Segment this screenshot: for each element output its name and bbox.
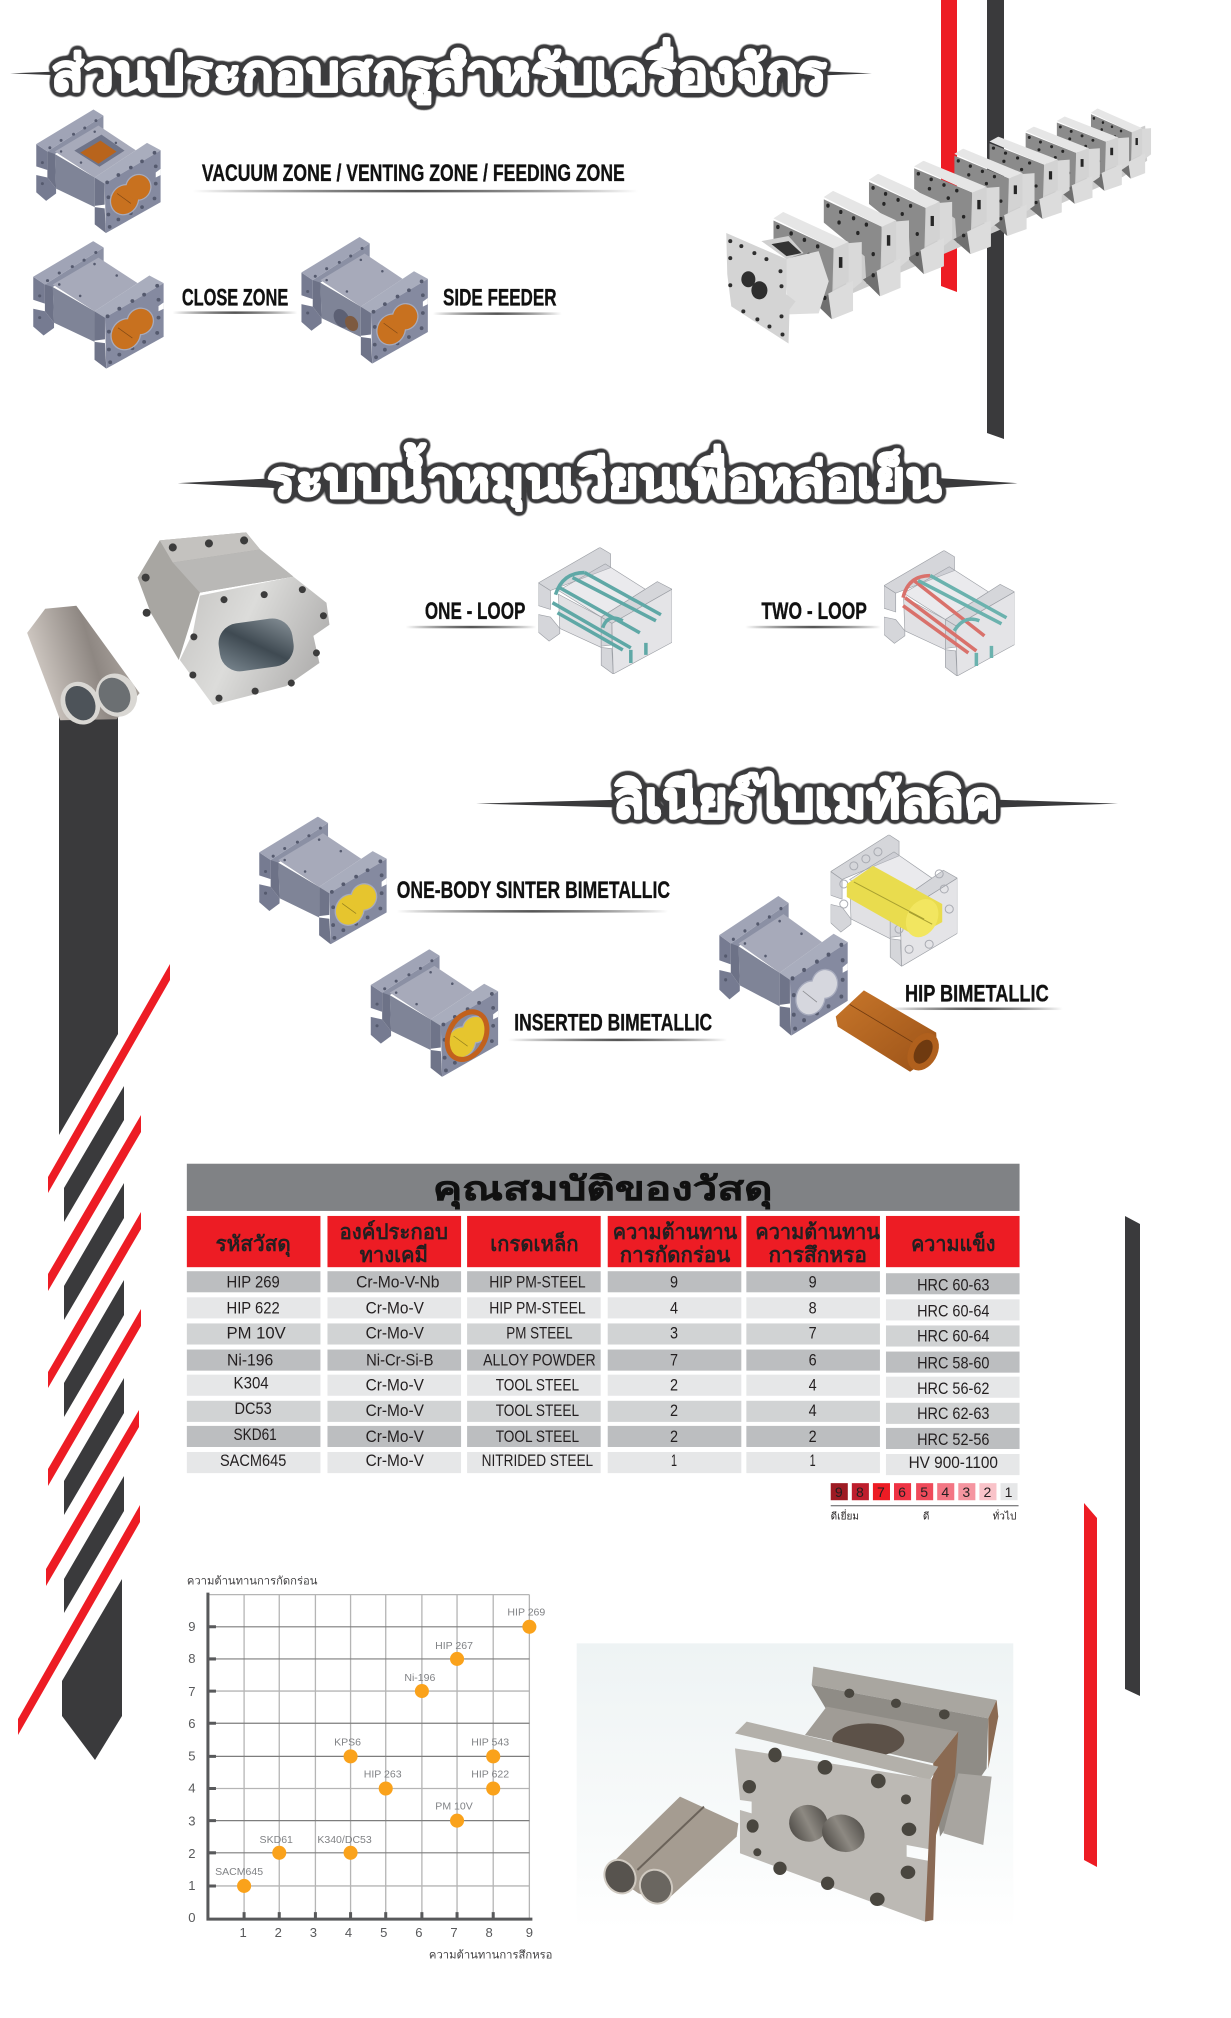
row HIP 269: HIP 269 bbox=[227, 1272, 280, 1291]
data labels: SKD61 bbox=[260, 1834, 293, 1846]
data labels: HIP 263 bbox=[364, 1768, 402, 1780]
title: barrel components: ส่วนประกอบสกรูสำหรับเครื่องจักร bbox=[51, 37, 827, 104]
row SKD61 bbox=[187, 1425, 1020, 1449]
x axis ticks: 1 bbox=[239, 1925, 247, 1940]
title: bimetallic liner bbox=[476, 771, 1118, 829]
rating legend: 7 bbox=[877, 1484, 885, 1500]
y axis ticks: 2 bbox=[188, 1846, 195, 1861]
label: two loop bbox=[745, 598, 881, 628]
icon: copper liner bbox=[836, 990, 945, 1076]
data labels: HIP 269 bbox=[507, 1607, 545, 1619]
row SKD61: 2 bbox=[670, 1427, 678, 1446]
icon: vacuum zone barrel bbox=[36, 109, 161, 233]
row SACM645: SACM645 bbox=[220, 1451, 286, 1470]
label: close zone bbox=[173, 284, 297, 314]
row Ni-196: Ni-196 bbox=[227, 1351, 273, 1370]
row SKD61: HRC 52-56 bbox=[917, 1430, 989, 1449]
label: hip bimetallic: HIP BIMETALLIC bbox=[905, 980, 1049, 1007]
row HIP 269: 9 bbox=[670, 1272, 678, 1291]
row PM 10V: PM 10V bbox=[227, 1324, 286, 1343]
icon: one-body sinter barrel bbox=[259, 817, 387, 944]
row K304: 4 bbox=[809, 1376, 817, 1395]
row DC53: HRC 62-63 bbox=[917, 1404, 989, 1423]
x axis ticks: 5 bbox=[380, 1925, 387, 1940]
icon: inserted bimetallic barrel bbox=[371, 949, 498, 1077]
row Ni-196: HRC 58-60 bbox=[917, 1354, 989, 1373]
y axis title: ความต้านทานการกัดกร่อน bbox=[187, 1576, 318, 1588]
row DC53: Cr-Mo-V bbox=[366, 1401, 424, 1420]
row HIP 622: Cr-Mo-V bbox=[366, 1298, 424, 1317]
table title bar: คุณสมบัติของวัสดุ bbox=[433, 1171, 772, 1210]
row SKD61: SKD61 bbox=[234, 1425, 277, 1444]
label: one loop: ONE - LOOP bbox=[425, 598, 525, 625]
rating legend: 9 bbox=[835, 1484, 843, 1500]
row PM 10V: Cr-Mo-V bbox=[366, 1324, 424, 1343]
x axis ticks: 7 bbox=[450, 1925, 458, 1940]
material properties table bbox=[187, 1164, 1020, 1475]
x axis ticks: 2 bbox=[275, 1925, 282, 1940]
row SACM645: Cr-Mo-V bbox=[366, 1451, 424, 1470]
row SKD61: TOOL STEEL bbox=[496, 1427, 579, 1446]
right red stripe bbox=[1084, 1503, 1097, 1867]
row K304: HRC 56-62 bbox=[917, 1379, 989, 1398]
icon: hip bimetallic barrel bbox=[719, 896, 848, 1036]
data labels: KPS6 bbox=[334, 1736, 361, 1748]
photo: segmented barrel assembly bbox=[726, 108, 1151, 344]
table title bar bbox=[187, 1164, 1020, 1211]
y axis ticks: 1 bbox=[188, 1878, 195, 1893]
row Ni-196: Ni-Cr-Si-B bbox=[366, 1351, 433, 1370]
top red stripe bbox=[941, 0, 957, 292]
row HIP 269: 9 bbox=[809, 1272, 817, 1291]
x axis ticks: 4 bbox=[345, 1925, 352, 1940]
label: vacuum zone: VACUUM ZONE / VENTING ZONE / FEEDING ZONE bbox=[202, 160, 625, 187]
row DC53: DC53 bbox=[235, 1399, 272, 1418]
row K304 bbox=[187, 1374, 1020, 1398]
x axis ticks: 8 bbox=[486, 1925, 493, 1940]
y axis ticks bbox=[188, 1619, 195, 1925]
row Ni-196: 6 bbox=[809, 1351, 817, 1370]
rating legend: 5 bbox=[920, 1484, 928, 1500]
icon: close zone barrel bbox=[33, 241, 164, 369]
table header row: ทางเคมี bbox=[360, 1243, 428, 1267]
row SACM645: HV 900-1100 bbox=[909, 1453, 998, 1472]
table header row: ความต้านทาน bbox=[755, 1220, 880, 1244]
icon: side feeder barrel bbox=[301, 237, 428, 364]
title: water circulation: ระบบน้ำหมุนเวียนเพื่อหล่อเย็น bbox=[267, 443, 941, 511]
row HIP 269: HRC 60-63 bbox=[917, 1275, 989, 1294]
table header row: รหัสวัสดุ bbox=[215, 1233, 291, 1258]
table header row: การกัดกร่อน bbox=[620, 1244, 731, 1267]
row HIP 269 bbox=[187, 1271, 1020, 1294]
label: side feeder bbox=[433, 284, 562, 315]
rating legend: 2 bbox=[984, 1484, 992, 1500]
label: close zone: CLOSE ZONE bbox=[182, 284, 288, 311]
photo: steel barrel block bbox=[138, 532, 329, 705]
y axis ticks: 5 bbox=[188, 1748, 195, 1763]
left screw decoration bbox=[18, 712, 170, 1760]
label: one loop bbox=[406, 598, 536, 628]
row SKD61: 2 bbox=[809, 1427, 817, 1446]
row DC53: TOOL STEEL bbox=[496, 1401, 579, 1420]
title: bimetallic liner: ลิเนียร์ไบเมทัลลิค bbox=[613, 771, 998, 829]
row HIP 269: HIP PM-STEEL bbox=[489, 1272, 586, 1291]
row PM 10V: PM STEEL bbox=[506, 1324, 573, 1343]
table header row: ความแข็ง bbox=[911, 1230, 995, 1256]
row K304: TOOL STEEL bbox=[496, 1376, 579, 1395]
row Ni-196 bbox=[187, 1350, 1020, 1373]
row SACM645: 1 bbox=[810, 1451, 816, 1470]
row K304: Cr-Mo-V bbox=[366, 1376, 424, 1395]
data labels: HIP 622 bbox=[471, 1768, 509, 1780]
y axis ticks: 6 bbox=[188, 1716, 195, 1731]
photo: barrel with twin liner bbox=[577, 1643, 1013, 1930]
icon: yellow liner in transparent barrel bbox=[831, 835, 957, 966]
y axis ticks: 3 bbox=[188, 1814, 195, 1829]
table header row: เกรดเหล็ก bbox=[490, 1230, 579, 1256]
data labels: HIP 267 bbox=[435, 1640, 473, 1652]
data labels: Ni-196 bbox=[404, 1672, 436, 1684]
data labels: K340/DC53 bbox=[317, 1834, 372, 1846]
row SACM645 bbox=[187, 1451, 1020, 1475]
label: two loop: TWO - LOOP bbox=[761, 598, 867, 625]
data labels: PM 10V bbox=[435, 1801, 473, 1813]
x axis ticks bbox=[239, 1925, 533, 1940]
icon: one loop cooling bbox=[538, 547, 672, 674]
data labels: SACM645 bbox=[215, 1866, 263, 1878]
table header row: องค์ประกอบ bbox=[340, 1219, 448, 1244]
rating legend: 4 bbox=[941, 1484, 949, 1500]
row HIP 622 bbox=[187, 1297, 1020, 1320]
y axis ticks: 7 bbox=[188, 1684, 195, 1699]
row HIP 622: HIP 622 bbox=[227, 1298, 280, 1317]
x axis title: ความต้านทานการสึกหรอ bbox=[429, 1949, 552, 1961]
row SKD61: Cr-Mo-V bbox=[366, 1427, 424, 1446]
right dark stripe bbox=[1125, 1216, 1140, 1696]
y axis ticks: 9 bbox=[188, 1619, 195, 1634]
row DC53 bbox=[187, 1399, 1020, 1424]
table header row bbox=[187, 1216, 1020, 1267]
label: one-body sinter bimetallic: ONE-BODY SINTER BIMETALLIC bbox=[397, 877, 670, 904]
row SACM645: NITRIDED STEEL bbox=[482, 1451, 593, 1470]
row HIP 622: 8 bbox=[809, 1298, 817, 1317]
y axis ticks: 0 bbox=[188, 1910, 195, 1925]
row Ni-196: 7 bbox=[670, 1351, 678, 1370]
row DC53: 2 bbox=[670, 1401, 678, 1420]
data points bbox=[237, 1620, 536, 1893]
row PM 10V: 3 bbox=[670, 1324, 678, 1343]
label: inserted bimetallic: INSERTED BIMETALLIC bbox=[514, 1010, 712, 1037]
rating legend bbox=[831, 1483, 1019, 1522]
x axis ticks: 6 bbox=[415, 1925, 423, 1940]
x axis ticks: 3 bbox=[310, 1925, 317, 1940]
row SACM645: 1 bbox=[671, 1451, 677, 1470]
row PM 10V: 7 bbox=[809, 1324, 817, 1343]
row PM 10V bbox=[187, 1323, 1020, 1347]
row K304: K304 bbox=[234, 1374, 269, 1393]
row HIP 622: HRC 60-64 bbox=[917, 1301, 989, 1320]
data labels: HIP 543 bbox=[471, 1736, 509, 1748]
row HIP 622: 4 bbox=[670, 1298, 678, 1317]
rating legend: ทั่วไป bbox=[993, 1508, 1016, 1522]
row K304: 2 bbox=[670, 1376, 678, 1395]
row Ni-196: ALLOY POWDER bbox=[483, 1351, 596, 1370]
properties table and chart bbox=[187, 1164, 1020, 1961]
label: side feeder: SIDE FEEDER bbox=[443, 284, 556, 311]
rating legend: 3 bbox=[962, 1484, 970, 1500]
row PM 10V: HRC 60-64 bbox=[917, 1327, 989, 1346]
photo: bimetal liner bbox=[27, 606, 145, 732]
row HIP 622: HIP PM-STEEL bbox=[489, 1298, 586, 1317]
rating legend: 1 bbox=[1005, 1484, 1013, 1500]
rating legend: 8 bbox=[856, 1484, 864, 1500]
rating legend: ดีเยี่ยม bbox=[831, 1508, 859, 1522]
row HIP 269: Cr-Mo-V-Nb bbox=[356, 1272, 439, 1291]
table header row: การสึกหรอ bbox=[768, 1244, 867, 1267]
y axis ticks: 8 bbox=[188, 1651, 195, 1666]
rating legend: 6 bbox=[898, 1484, 906, 1500]
barrel sections bbox=[10, 37, 1151, 1077]
scatter chart bbox=[187, 1576, 552, 1961]
y axis ticks: 4 bbox=[188, 1781, 195, 1796]
top dark stripe bbox=[987, 0, 1004, 439]
title: water circulation bbox=[178, 443, 1018, 511]
rating legend: ดี bbox=[923, 1510, 929, 1522]
x axis ticks: 9 bbox=[526, 1925, 533, 1940]
data labels bbox=[215, 1607, 545, 1878]
table header row: ความต้านทาน bbox=[613, 1220, 738, 1244]
icon: two loop cooling bbox=[884, 550, 1015, 676]
row DC53: 4 bbox=[809, 1401, 817, 1420]
